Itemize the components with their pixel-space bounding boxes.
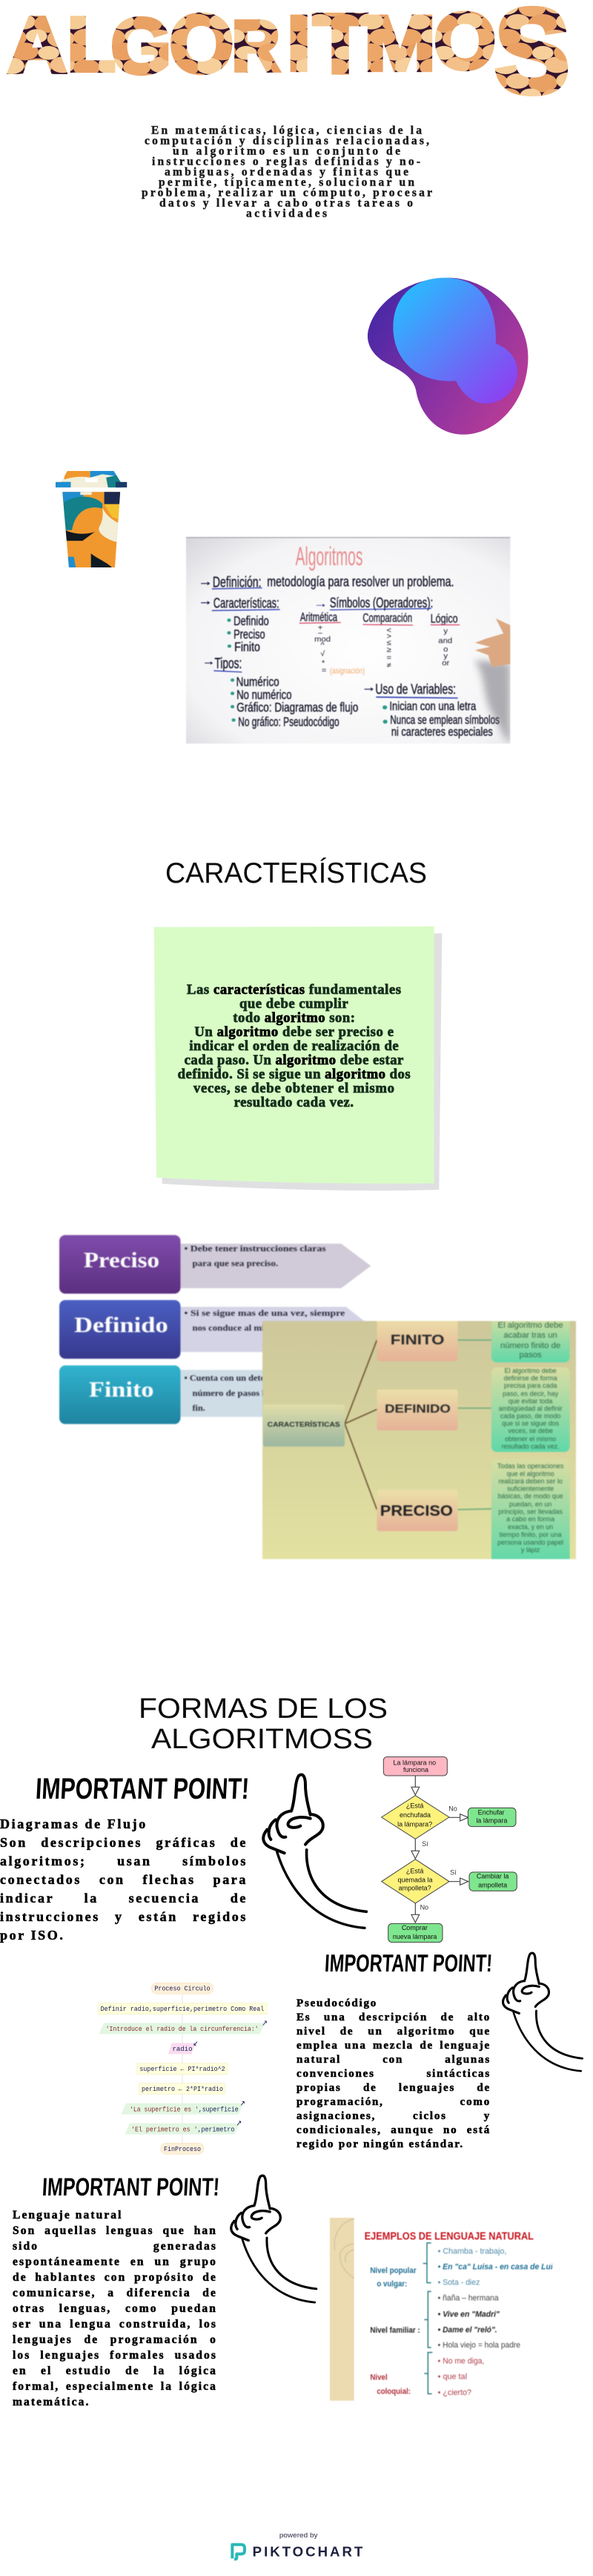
note text: veces, se debe obtener el mismo <box>193 1081 394 1096</box>
branch labels <box>420 1805 457 1911</box>
level: colloquial: Nivel <box>370 2374 388 2382</box>
assign superficie: superficie ← PI*radio^2 <box>139 2066 225 2073</box>
note text: indicar el orden de realización de <box>189 1038 399 1054</box>
heading: important point 1: IMPORTANT POINT! <box>35 1773 250 1805</box>
note text <box>178 982 411 1110</box>
whiteboard left notes: Numérico <box>236 675 279 689</box>
whiteboard symbols: Lógico <box>431 612 458 625</box>
define variables: Definir radio,superficie,perimetro Como Real <box>101 2006 264 2013</box>
text block: Lenguaje natural: lenguajes de programación o <box>13 2333 217 2346</box>
description boxes: obtener el mismo <box>505 1435 556 1443</box>
description boxes: precisa para cada <box>504 1382 557 1389</box>
description boxes: que si se sigue dos <box>502 1420 560 1427</box>
description boxes: Todas las operaciones <box>497 1463 564 1470</box>
description boxes: y lápiz <box>521 1546 540 1553</box>
whiteboard symbols: or <box>442 659 450 668</box>
text block: Pseudocódigo: propias de lenguajes de <box>296 2082 491 2094</box>
description boxes: ambigüedad al definir <box>499 1405 563 1412</box>
title: ALGORITMOS in wood-log texture <box>6 6 568 96</box>
node DEFINIDO <box>377 1389 458 1430</box>
text block: Lenguaje natural: los lenguajes formales usados <box>13 2349 217 2362</box>
whiteboard symbols: + <box>318 624 322 632</box>
branch labels: Sí <box>450 1868 457 1876</box>
action: buy lamp: nueva lámpara <box>393 1933 437 1940</box>
assign superficie <box>137 2063 228 2075</box>
action: change bulb: Cambiar la <box>477 1873 508 1880</box>
decision: burned out: ampolleta? <box>399 1885 431 1892</box>
text block: Pseudocódigo <box>296 1997 491 2150</box>
process start <box>151 1983 213 1994</box>
note paper <box>154 926 434 1184</box>
whiteboard left notes: Tipos: <box>214 654 242 672</box>
heading: important point 3: IMPORTANT POINT! <box>42 2173 220 2201</box>
text block: Diagramas de Flujo <box>0 1816 248 1943</box>
output prompt <box>99 2021 266 2034</box>
whiteboard symbols: = <box>322 666 326 675</box>
output superficie: 'La superficie es ',superficie <box>130 2106 239 2113</box>
whiteboard symbols <box>299 595 460 676</box>
whiteboard symbols: y <box>443 627 448 636</box>
intro paragraph: ambiguas, ordenadas y finitas que <box>165 166 408 178</box>
icon: coffee cup <box>56 470 127 567</box>
root node <box>263 1404 345 1446</box>
start node <box>383 1757 447 1776</box>
description boxes: paso, es decir, hay <box>503 1390 559 1397</box>
start node: funciona <box>403 1766 428 1773</box>
description boxes: acabar tras un <box>503 1331 557 1340</box>
decision: burned out: quemada la <box>397 1876 433 1883</box>
whiteboard symbols: y <box>443 652 448 660</box>
output perimetro <box>125 2121 241 2135</box>
text block: Lenguaje natural: de hablantes con propósito de <box>13 2271 217 2284</box>
text block: Diagramas de Flujo: Diagramas de Flujo <box>0 1816 148 1831</box>
process end <box>161 2143 204 2154</box>
whiteboard variable usage <box>362 679 500 738</box>
whiteboard left notes: → <box>202 655 215 668</box>
intro paragraph: permite, típicamente, solucionar un <box>159 177 414 188</box>
node FINITO: FINITO <box>391 1332 445 1348</box>
whiteboard symbols: < <box>387 627 391 635</box>
text block: Pseudocódigo: Es una descripción de alto <box>296 2012 491 2023</box>
level: familiar: • ñaña – hermana <box>438 2294 499 2303</box>
action: plug in: Enchufar <box>478 1808 505 1816</box>
level: popular <box>370 2247 561 2288</box>
branch labels: Sí <box>422 1840 428 1848</box>
description boxes <box>491 1315 570 1563</box>
panel: green sticky note with characteristics text <box>154 926 442 1191</box>
level: popular: • En "ca" Luisa - en casa de Luisa <box>438 2262 561 2271</box>
icon: pointing hand 1 <box>262 1773 368 1929</box>
description boxes: tiempo finito, por una <box>500 1531 562 1538</box>
whiteboard left notes: Definido <box>233 614 269 628</box>
process start: Proceso Circulo <box>154 1986 211 1993</box>
text block: Lenguaje natural: Son aquellas lenguas que han <box>13 2224 217 2237</box>
note text: definido. Si se sigue un algoritmo dos <box>178 1067 411 1082</box>
note text: resultado cada vez. <box>234 1095 354 1110</box>
level: colloquial <box>370 2357 484 2397</box>
node FINITO <box>377 1318 458 1361</box>
text block: Pseudocódigo: programación, como <box>296 2096 491 2108</box>
action: plug in <box>468 1808 516 1827</box>
note text: que debe cumplir <box>239 996 348 1012</box>
level: colloquial: coloquial: <box>377 2387 411 2396</box>
description boxes: definirse de forma <box>504 1374 557 1382</box>
braces <box>423 2243 432 2394</box>
whiteboard symbols: ^ <box>320 641 325 650</box>
level: popular: • Sota - diez <box>438 2279 480 2287</box>
action: plug in: la lámpara <box>476 1817 507 1825</box>
read radio: radio <box>172 2046 193 2053</box>
whiteboard variable usage: Inician con una letra <box>389 698 477 713</box>
decision: burned out: ¿Está <box>406 1867 423 1874</box>
text block: Lenguaje natural: en el estudio de la lógica <box>13 2365 217 2377</box>
description boxes: realizará deben ser lo <box>498 1478 563 1485</box>
row: Finito: fin. <box>192 1404 205 1413</box>
action: buy lamp: Comprar <box>402 1924 428 1931</box>
note text: todo algoritmo son: <box>233 1010 355 1026</box>
description boxes: básicas, de modo que <box>498 1492 563 1500</box>
whiteboard left notes: Gráfico: Diagramas de flujo <box>236 700 358 715</box>
text block: Lenguaje natural: formal, especialmente la lógica <box>13 2380 217 2393</box>
level: familiar: Nivel familiar : <box>370 2326 420 2335</box>
row: Definido <box>59 1300 376 1359</box>
assign perimetro: perimetro ← 2*PI*radio <box>142 2086 223 2093</box>
row: Preciso <box>59 1235 371 1294</box>
heading: CARACTERÍSTICAS: CARACTERÍSTICAS <box>165 857 427 889</box>
description boxes: que evitar toda <box>508 1397 552 1405</box>
text block: Diagramas de Flujo: algoritmos; usan símbolos <box>0 1853 248 1868</box>
note shadow <box>162 933 442 1190</box>
whiteboard variable usage: → <box>362 679 376 694</box>
row: Finito: • Cuenta con un determinado <box>184 1374 298 1383</box>
action: change bulb: ampolleta <box>478 1881 507 1888</box>
level: popular: Nivel popular <box>370 2266 417 2275</box>
note text: Un algoritmo debe ser preciso e <box>194 1024 394 1040</box>
level: colloquial: • que tal <box>438 2373 467 2382</box>
row: Preciso: • Debe tener instrucciones claras <box>184 1245 326 1254</box>
row: Finito: número de pasos hasta un <box>192 1389 296 1398</box>
whiteboard variable usage: ni caracteres especiales <box>391 724 493 738</box>
whiteboard symbols: ≠ <box>387 661 391 669</box>
whiteboard left notes: → <box>198 593 213 607</box>
intro paragraph <box>141 124 432 220</box>
row: Preciso: para que sea preciso. <box>192 1259 278 1268</box>
logo mark <box>232 2545 245 2559</box>
whiteboard symbols: √ <box>320 650 325 658</box>
row: Definido: • Si se sigue mas de una vez, siempre <box>184 1309 345 1318</box>
whiteboard symbols: * <box>322 659 325 668</box>
text block: Pseudocódigo: emplea una mezcla de lenguaje <box>296 2040 491 2052</box>
description boxes: pasos <box>520 1351 542 1360</box>
whiteboard left notes: Preciso <box>233 627 265 642</box>
text block: Diagramas de Flujo: indicar la secuencia de <box>0 1890 248 1905</box>
whiteboard symbols: (asignación) <box>330 667 365 676</box>
whiteboard symbols: o <box>443 645 448 653</box>
description boxes: principio, ser llevadas <box>498 1508 563 1515</box>
description boxes: que el algoritmo <box>507 1470 554 1478</box>
decision: plugged in: ¿Está <box>406 1802 423 1810</box>
text block: Diagramas de Flujo: conectados con flechas para <box>0 1872 248 1887</box>
image: whiteboard about algorithms <box>185 537 511 744</box>
decorative beige side band <box>330 2218 354 2401</box>
level: popular: o vulgar: <box>377 2279 407 2288</box>
text block: Diagramas de Flujo: Son descripciones gráficas de <box>0 1835 248 1850</box>
image: lamp flowchart <box>381 1756 517 1943</box>
description boxes: suficientemente <box>507 1485 554 1492</box>
whiteboard symbols: ≥ <box>387 646 391 654</box>
row: Finito <box>59 1366 359 1424</box>
description boxes: exacta, y en un <box>508 1523 553 1531</box>
whiteboard symbols: = <box>387 653 391 662</box>
action: buy lamp <box>388 1923 443 1943</box>
image: Preciso / Definido / Finito arrows list <box>59 1234 371 1425</box>
intro paragraph: computación y disciplinas relacionadas, <box>145 135 429 147</box>
text block: Lenguaje natural: sido generadas <box>13 2240 217 2253</box>
whiteboard left notes: Finito <box>234 640 260 654</box>
heading: FORMAS DE LOS ALGORITMOSS: ALGORITMOSS <box>151 1724 373 1755</box>
row: Definido: nos conduce al mismo resultado <box>192 1324 321 1333</box>
text block: Lenguaje natural <box>12 2209 217 2408</box>
branch labels: No <box>448 1805 457 1812</box>
whiteboard left notes: Definición: <box>213 573 262 590</box>
logo wordmark: PIKTOCHART <box>253 2544 363 2560</box>
start node: La lámpara no <box>394 1759 436 1766</box>
whiteboard left notes: Características: <box>213 596 279 611</box>
text block: Pseudocódigo: nivel de un algoritmo que <box>296 2026 491 2038</box>
presenter hand and shadow <box>475 619 510 743</box>
read radio <box>168 2042 197 2054</box>
powered by label: powered by <box>279 2531 318 2539</box>
heading: FORMAS DE LOS ALGORITMOSS: FORMAS DE LOS <box>139 1693 388 1725</box>
text block: Pseudocódigo: regido por ningún estándar. <box>296 2138 464 2150</box>
image: pseudocode flowchart Proceso Circulo <box>98 1983 267 2155</box>
text block: Pseudocódigo: convenciones sintácticas <box>296 2068 491 2080</box>
note text: Las características fundamentales <box>187 982 401 998</box>
whiteboard symbols: → <box>314 596 328 610</box>
decision: plugged in: enchufada <box>400 1811 431 1819</box>
image: whiteboard about algorithms: Algoritmos <box>296 541 362 570</box>
whiteboard symbols: Aritmética <box>300 610 337 624</box>
whiteboard left notes: → <box>198 573 213 588</box>
whiteboard left notes <box>198 573 454 729</box>
output prompt: 'Introduce el radio de la circunferencia:' <box>106 2026 259 2033</box>
text block: Lenguaje natural: ser una lengua construida, los <box>13 2318 217 2330</box>
intro paragraph: actividades <box>246 208 327 220</box>
level: colloquial: • No me diga, <box>438 2357 484 2366</box>
action: change bulb <box>469 1872 517 1891</box>
heading: FORMAS DE LOS ALGORITMOSS <box>139 1693 388 1755</box>
description boxes: persona usando papel <box>497 1538 563 1546</box>
connector lines <box>345 1340 491 1509</box>
text block: Lenguaje natural: Lenguaje natural <box>13 2209 123 2221</box>
text block: Pseudocódigo: condicionales, aunque no está <box>296 2124 491 2136</box>
whiteboard symbols: and <box>438 637 452 645</box>
text block: Lenguaje natural: espontáneamente en un grupo <box>13 2256 217 2268</box>
icon: pointing hand 2 <box>501 1952 583 2072</box>
title: EJEMPLOS DE LENGUAJE NATURAL <box>365 2230 534 2242</box>
whiteboard left notes: No numérico <box>236 688 292 702</box>
icon: pointing hand 3 <box>230 2175 317 2304</box>
whiteboard left notes: metodología para resolver un problema. <box>267 573 454 590</box>
intro paragraph: En matemáticas, lógica, ciencias de la <box>151 124 422 136</box>
output superficie <box>121 2101 244 2115</box>
intro paragraph: datos y llevar a cabo otras tareas o <box>159 197 413 209</box>
description boxes: resultado cada vez. <box>502 1443 560 1450</box>
text block: Pseudocódigo: asignaciones, ciclos y <box>296 2110 491 2122</box>
description boxes: puedan, en un <box>509 1501 551 1508</box>
image: characteristics mind map <box>262 1320 577 1560</box>
text block: Lenguaje natural: matemática. <box>13 2396 90 2408</box>
decision: plugged in: la lámpara? <box>397 1820 432 1828</box>
whiteboard symbols: Comparación <box>362 610 412 625</box>
define variables <box>98 2003 267 2015</box>
description boxes: número finito de <box>500 1341 560 1350</box>
node PRECISO: PRECISO <box>380 1503 453 1520</box>
text block: Pseudocódigo: Pseudocódigo <box>296 1997 377 2009</box>
root node: CARACTERÍSTICAS <box>268 1420 340 1428</box>
node DEFINIDO: DEFINIDO <box>385 1403 451 1415</box>
intro paragraph: problema, realizar un cómputo, procesar <box>142 187 432 199</box>
whiteboard symbols: Símbolos (Operadores): <box>330 595 433 611</box>
whiteboard variable usage: Uso de Variables: <box>375 682 456 697</box>
image: natural language examples <box>329 2218 553 2402</box>
description boxes: a cabo en forma <box>506 1515 554 1523</box>
description boxes: cada paso, de modo <box>500 1412 560 1420</box>
row: Finito: Finito <box>89 1378 153 1402</box>
note text: cada paso. Un algoritmo debe estar <box>185 1053 403 1068</box>
whiteboard left notes: No gráfico: Pseudocódigo <box>238 715 339 729</box>
branch labels: No <box>420 1904 428 1911</box>
assign perimetro <box>139 2083 225 2094</box>
description boxes: veces, se debe <box>508 1427 553 1434</box>
node PRECISO <box>377 1490 458 1531</box>
output perimetro: 'El perimetro es ',perimetro <box>131 2126 234 2133</box>
level: colloquial: • ¿cierto? <box>438 2388 471 2397</box>
text block: Lenguaje natural: comunicarse, a diferencia de <box>13 2287 217 2299</box>
heading: important point 2: IMPORTANT POINT! <box>324 1949 493 1977</box>
intro paragraph: un algoritmo es un conjunto de <box>173 145 400 157</box>
whiteboard variable usage: Nunca se emplean símbolos <box>390 712 500 727</box>
row: Preciso: Preciso <box>84 1248 159 1272</box>
level: popular: • Chamba - trabajo, <box>438 2247 506 2256</box>
whiteboard symbols: − <box>318 630 322 638</box>
description boxes: El algoritmo debe <box>505 1367 557 1374</box>
level: familiar <box>370 2294 520 2350</box>
description boxes: El algoritmo debe <box>498 1321 563 1330</box>
footer: powered by Piktochart <box>231 2531 363 2560</box>
row: Definido: Definido <box>74 1314 168 1337</box>
decision: burned out <box>382 1859 449 1903</box>
whiteboard symbols: ≤ <box>387 639 391 647</box>
text block: Lenguaje natural: otras lenguas, como puedan <box>13 2302 217 2315</box>
process end: FinProceso <box>164 2146 201 2153</box>
level: familiar: • Dame el "reló". <box>438 2325 497 2334</box>
decision: plugged in <box>382 1796 449 1839</box>
icon: gradient blob <box>368 277 528 435</box>
level: familiar: • Hola viejo = hola padre <box>438 2341 520 2350</box>
text block: Diagramas de Flujo: instrucciones y están regidos <box>0 1909 248 1924</box>
text block: Pseudocódigo: natural con algunas <box>296 2054 491 2066</box>
whiteboard symbols: mod <box>314 635 331 643</box>
whiteboard symbols: > <box>387 632 391 640</box>
level: familiar: • Vive en "Madri" <box>438 2310 500 2319</box>
intro paragraph: instrucciones o reglas definidas y no- <box>152 156 420 168</box>
text block: Diagramas de Flujo: por ISO. <box>0 1927 65 1942</box>
